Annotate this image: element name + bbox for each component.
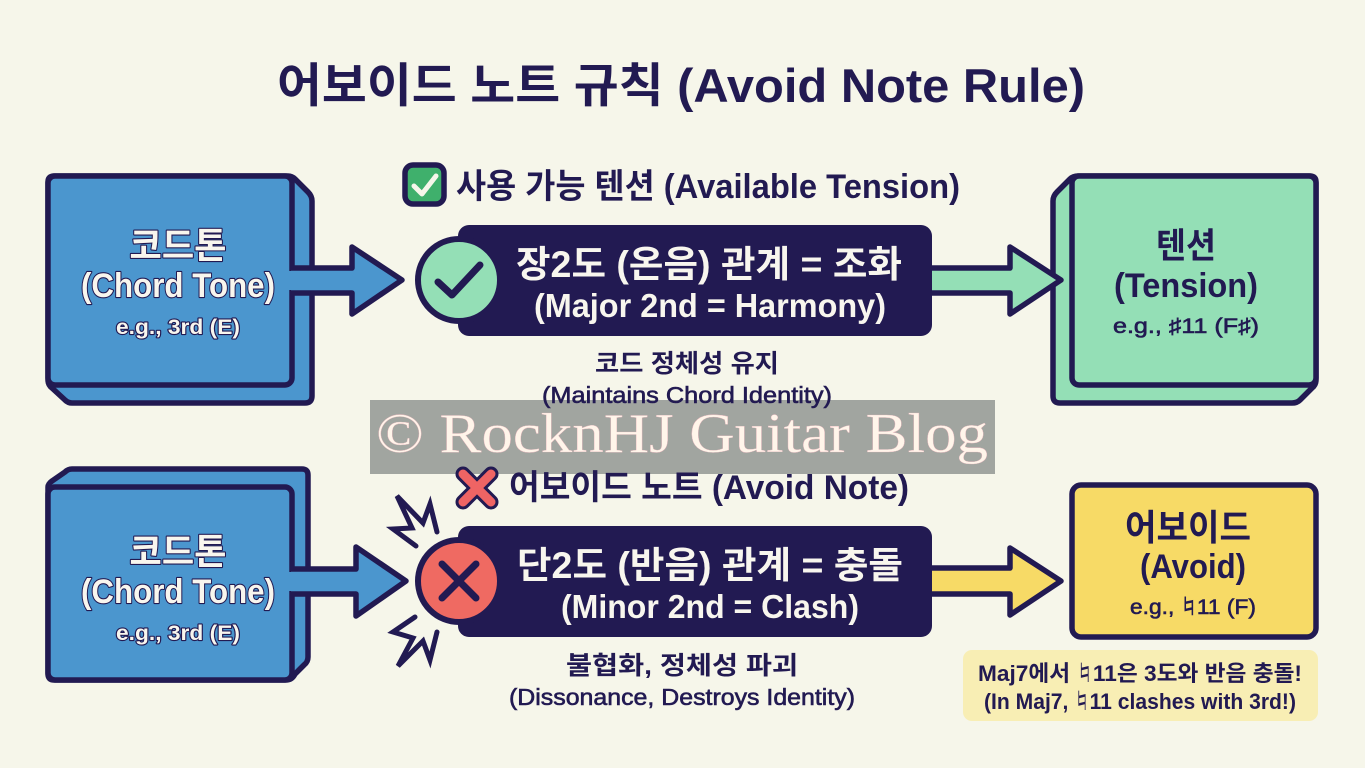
panel: chord tone top: 코드톤 bbox=[130, 225, 226, 266]
callout: maj7 note: Maj7에서 ♮11은 3도와 반음 충돌! bbox=[978, 661, 1302, 686]
panel: major 2nd bar bbox=[458, 225, 932, 336]
heading: available tension: 사용 가능 텐션 (Available Tension) bbox=[456, 168, 960, 206]
panel: minor 2nd bar bbox=[458, 526, 932, 637]
arrow: blue top bbox=[288, 247, 402, 314]
text: dissonance destroys identity: (Dissonance, Destroys Identity) bbox=[509, 684, 855, 710]
callout: maj7 note bbox=[963, 650, 1318, 721]
panel: avoid: 어보이드 bbox=[1125, 507, 1251, 548]
title: 어보이드 노트 규칙 (Avoid Note Rule) bbox=[277, 59, 1085, 112]
panel: avoid bbox=[1072, 485, 1316, 637]
text: maintains chord identity: 코드 정체성 유지 bbox=[595, 350, 779, 378]
icon: clash spark bottom bbox=[393, 617, 437, 666]
panel: chord tone top: e.g., 3rd (E) bbox=[116, 316, 240, 339]
text: maintains chord identity: (Maintains Chord Identity) bbox=[542, 382, 832, 408]
panel: chord tone bottom: e.g., 3rd (E) bbox=[116, 622, 240, 645]
panel: chord tone bottom: (Chord Tone) bbox=[81, 573, 275, 611]
panel: tension: (Tension) bbox=[1114, 267, 1258, 305]
panel: chord tone bottom bbox=[48, 469, 308, 680]
panel: tension: e.g., ♯11 (F♯) bbox=[1113, 315, 1259, 338]
arrow: green bbox=[932, 247, 1061, 314]
panel: avoid: e.g., ♮11 (F) bbox=[1130, 596, 1256, 619]
panel: major 2nd bar: 장2도 (온음) 관계 = 조화 bbox=[516, 244, 902, 285]
panel: chord tone bottom: 코드톤 bbox=[130, 531, 226, 572]
icon: red cross circle bbox=[418, 540, 500, 622]
icon: red cross bbox=[463, 474, 491, 502]
panel: chord tone top bbox=[48, 176, 312, 403]
arrow: blue bottom bbox=[288, 547, 406, 616]
text: dissonance destroys identity bbox=[509, 652, 855, 710]
panel: avoid: (Avoid) bbox=[1140, 548, 1246, 586]
icon: green check box bbox=[405, 165, 444, 204]
panel: chord tone top: (Chord Tone) bbox=[81, 267, 275, 305]
arrow: yellow bbox=[932, 548, 1061, 615]
panel: tension bbox=[1053, 176, 1316, 403]
panel: minor 2nd bar: 단2도 (반음) 관계 = 충돌 bbox=[517, 545, 903, 586]
panel: minor 2nd bar: (Minor 2nd = Clash) bbox=[561, 588, 859, 625]
text: maintains chord identity bbox=[542, 350, 832, 408]
panel: tension: 텐션 bbox=[1156, 227, 1216, 266]
heading: avoid note: 어보이드 노트 (Avoid Note) bbox=[509, 469, 909, 507]
panel: major 2nd bar: (Major 2nd = Harmony) bbox=[534, 287, 886, 324]
watermark: © RocknHJ Guitar Blog bbox=[376, 403, 988, 465]
icon: green check circle bbox=[418, 239, 500, 321]
callout: maj7 note: (In Maj7, ♮11 clashes with 3rd!) bbox=[984, 689, 1296, 714]
icon: clash spark top bbox=[393, 496, 437, 546]
text: dissonance destroys identity: 불협화, 정체성 파괴 bbox=[566, 652, 798, 680]
